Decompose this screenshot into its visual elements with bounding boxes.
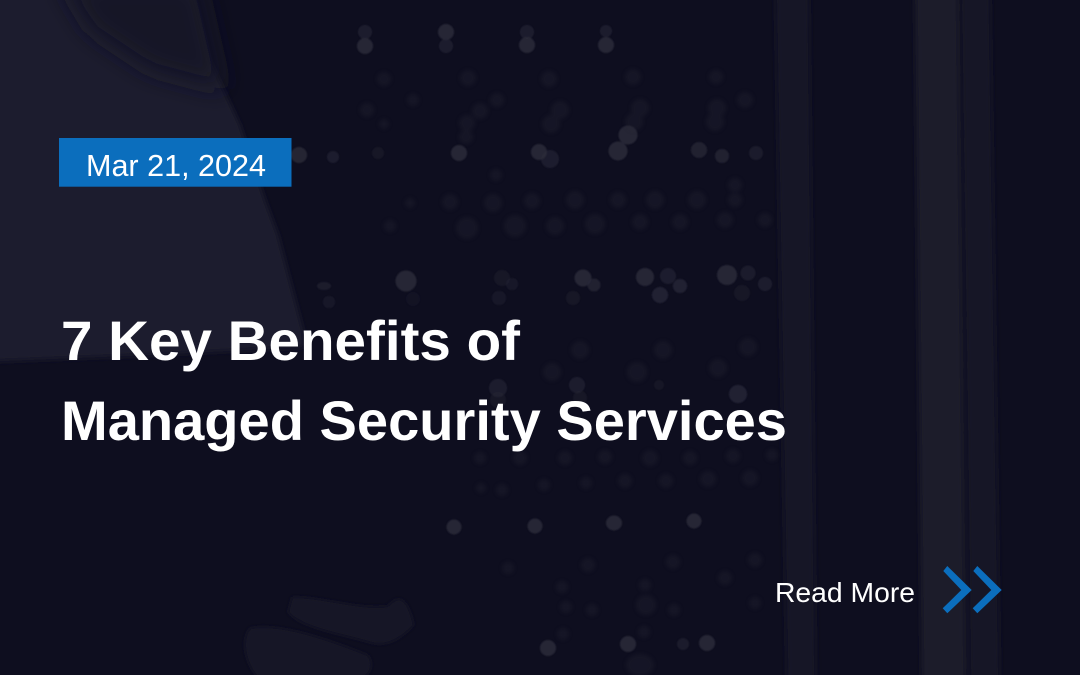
background photo: faint bokeh lights xyxy=(360,69,778,675)
background photo: person silhouette xyxy=(0,0,305,362)
title: Managed Security Services xyxy=(61,389,787,452)
title: 7 Key Benefits of xyxy=(61,309,520,372)
icon: double chevron arrow xyxy=(943,566,1002,613)
read more link: Read More xyxy=(775,577,915,608)
date badge xyxy=(59,138,292,187)
background photo: bright bokeh lights xyxy=(291,24,772,656)
title xyxy=(61,309,787,452)
background photo: server rack pillars xyxy=(775,0,1000,675)
background photo: hand xyxy=(245,597,414,675)
date badge: Mar 21, 2024 xyxy=(86,148,266,183)
